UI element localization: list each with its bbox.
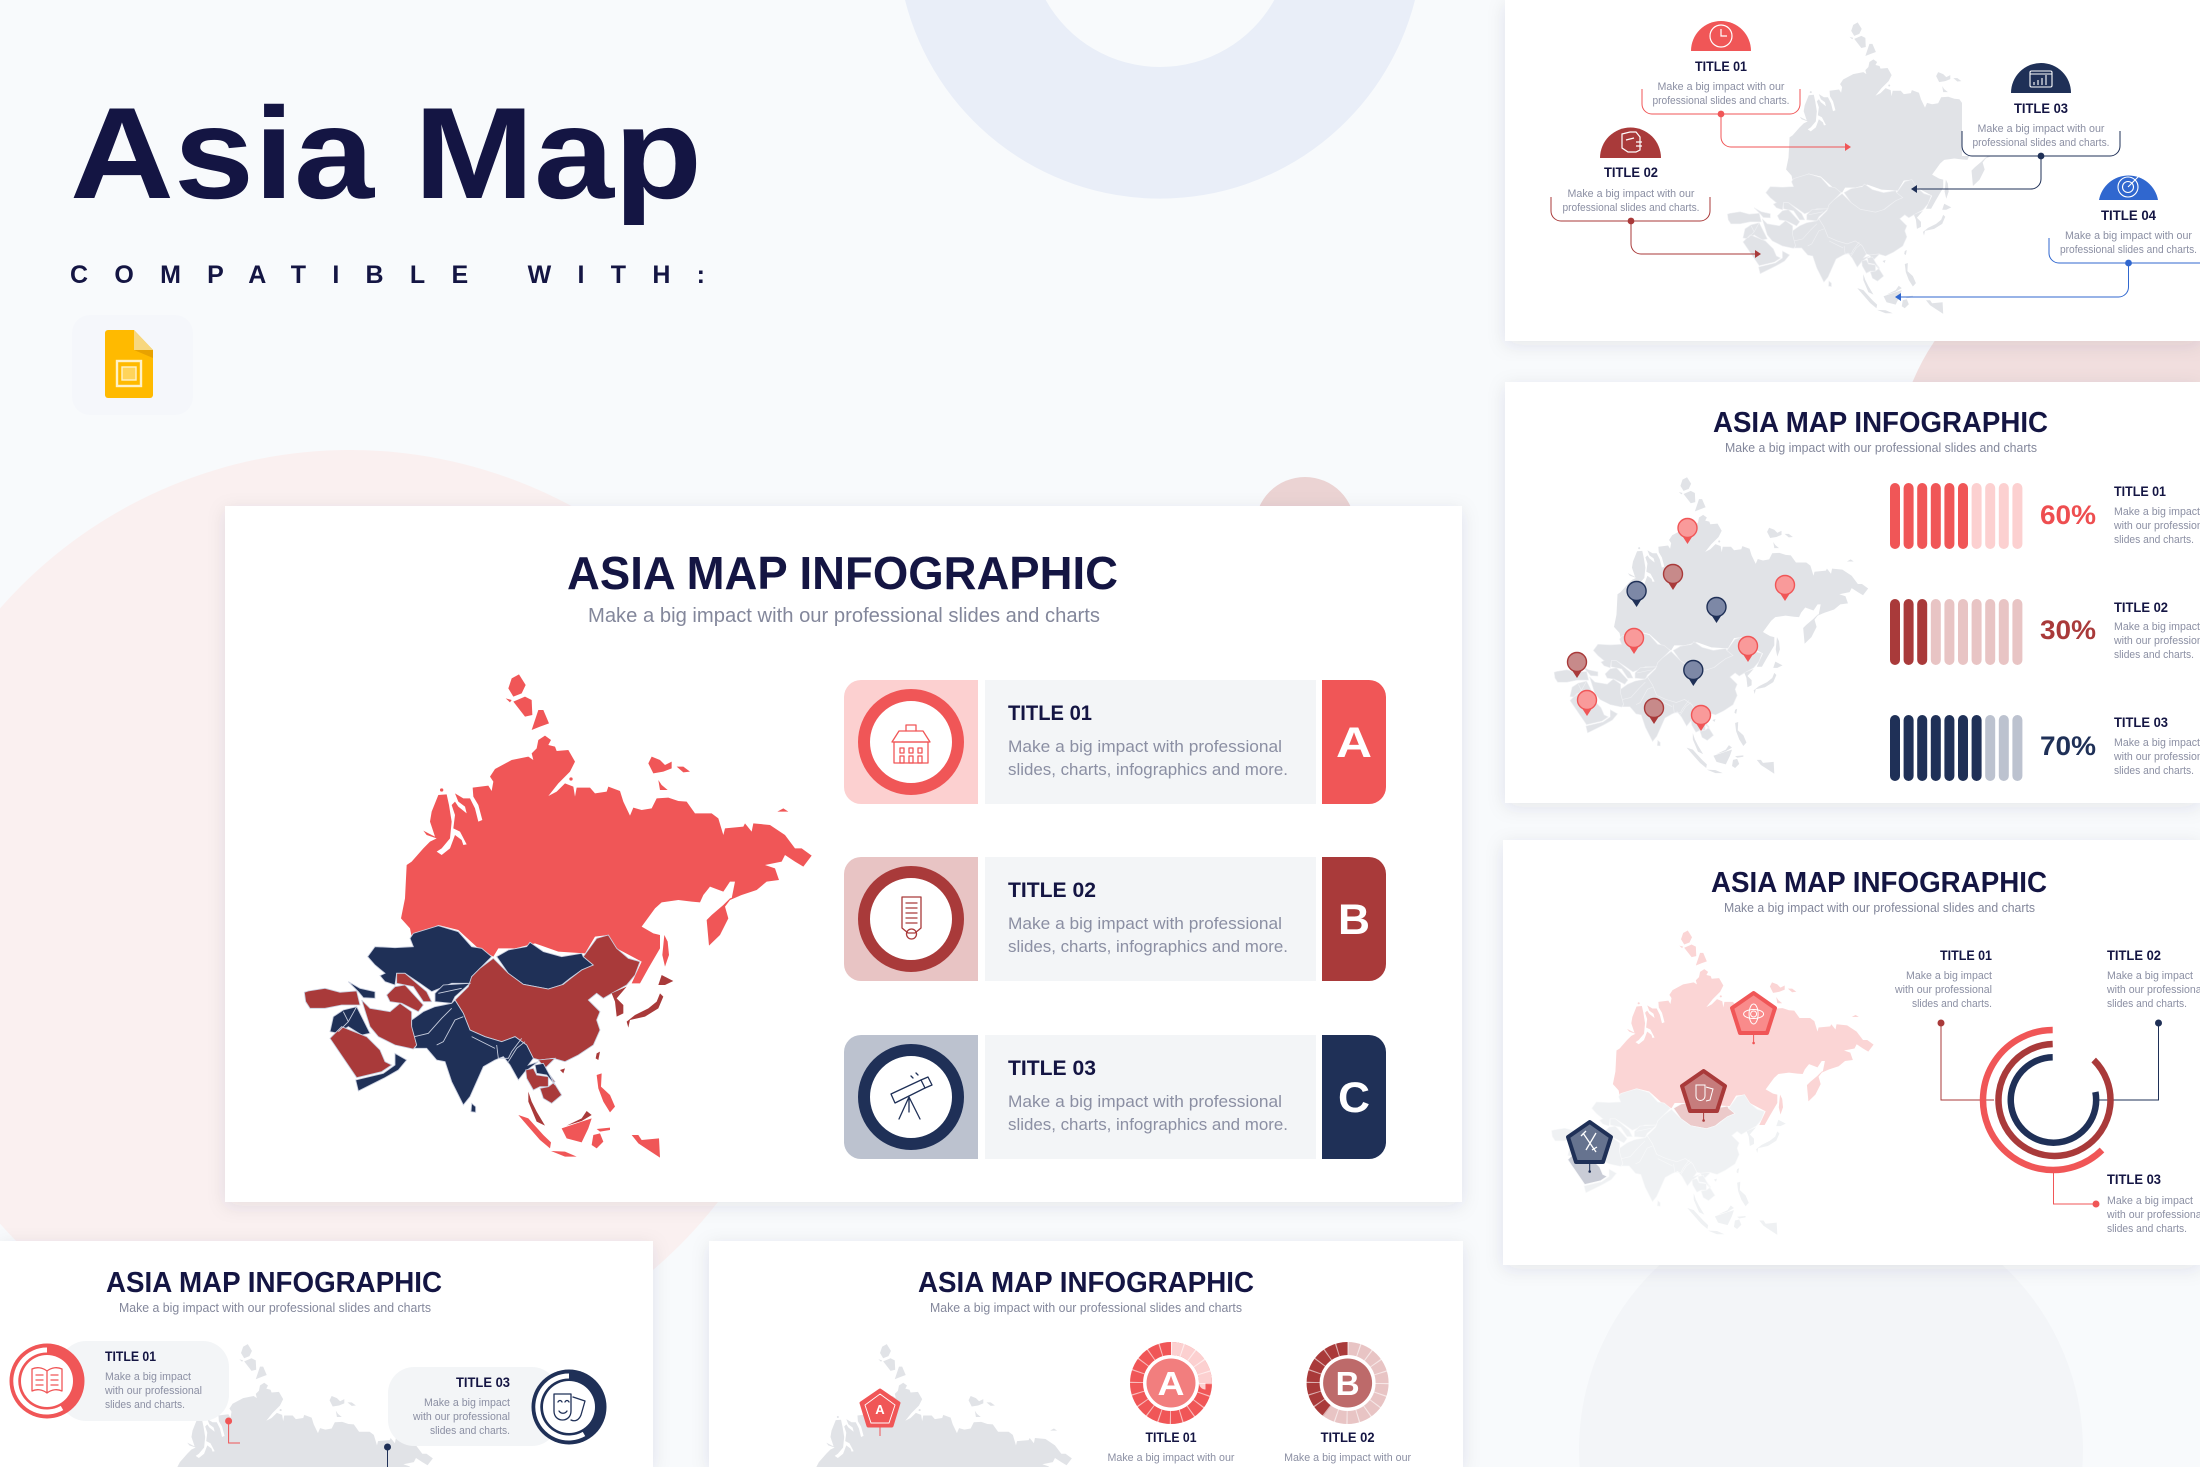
bar chart: 60%: 60% bbox=[2040, 500, 2096, 530]
bar chart: 30%: 30% bbox=[2040, 615, 2096, 645]
panel: bottom left slide bbox=[0, 1241, 653, 1467]
panel: main slide bbox=[225, 506, 1462, 1202]
decorative circle: rose at right bbox=[1895, 240, 2200, 700]
callout: title 01 bbox=[10, 1341, 229, 1421]
icon: telescope bbox=[891, 1073, 932, 1119]
subheading: Make a big impact with our professional slides and charts bbox=[1725, 440, 2037, 455]
icon: certificate bbox=[902, 897, 921, 939]
label: title 03: slides and charts. bbox=[2107, 1223, 2187, 1235]
label: title 02: TITLE 02 bbox=[2107, 948, 2161, 963]
marker: navy pentagon bbox=[1568, 1122, 1611, 1173]
bar chart: 30% bbox=[1890, 599, 2096, 665]
map: pink highlighted bbox=[1552, 930, 1874, 1235]
heading: ASIA MAP INFOGRAPHIC bbox=[106, 1267, 442, 1299]
row: title 02: B bbox=[1338, 896, 1370, 944]
decorative circle: large pink bbox=[0, 450, 816, 1382]
callout: title 02 bbox=[1551, 127, 1761, 258]
label: title 02: slides and charts. bbox=[2114, 649, 2194, 661]
map: grey partial bbox=[816, 1344, 1072, 1467]
map: grey partial bbox=[177, 1344, 433, 1467]
panel: top right slide with callouts bbox=[1505, 0, 2200, 341]
label: title 01: TITLE 01 bbox=[1940, 948, 1992, 963]
row: title 02 bbox=[844, 857, 1386, 981]
callout: title 01: with our professional bbox=[104, 1385, 202, 1397]
connector lines bbox=[1938, 1020, 2162, 1208]
marker: red pentagon bbox=[1732, 993, 1775, 1044]
row: title 02: TITLE 02 bbox=[1008, 879, 1096, 902]
radial chart: three rings bbox=[1983, 1030, 2110, 1170]
callout: title 01: Make a big impact bbox=[105, 1371, 191, 1383]
label: title 01: slides and charts. bbox=[2114, 534, 2194, 546]
row: title 03: TITLE 03 bbox=[1008, 1057, 1096, 1080]
callout: title 03: professional slides and charts. bbox=[1972, 137, 2110, 149]
label: title 02 bbox=[2113, 600, 2200, 661]
donut: A bbox=[1136, 1348, 1206, 1418]
bar chart: 60% bbox=[1890, 483, 2096, 549]
panel: right slide with rings bbox=[1503, 840, 2200, 1265]
heading: ASIA MAP INFOGRAPHIC bbox=[1711, 867, 2047, 899]
map pins bbox=[1568, 518, 1794, 731]
decorative circle: pale blue ring bbox=[905, 0, 1415, 199]
label: title 01 bbox=[2113, 484, 2200, 546]
callout: title 03: with our professional bbox=[412, 1411, 510, 1423]
panel: bottom centre slide bbox=[709, 1241, 1463, 1467]
marker: pentagon A bbox=[861, 1390, 899, 1436]
callout: title 04: Make a big impact with our bbox=[2065, 230, 2192, 242]
icon: masks bbox=[554, 1394, 585, 1421]
callout: title 01: slides and charts. bbox=[105, 1399, 185, 1411]
callout: title 03: TITLE 03 bbox=[456, 1375, 510, 1390]
label: title 03: TITLE 03 bbox=[2107, 1172, 2161, 1187]
heading: ASIA MAP INFOGRAPHIC bbox=[567, 547, 1118, 599]
heading: ASIA MAP INFOGRAPHIC bbox=[918, 1267, 1254, 1299]
label: title 01: slides and charts. bbox=[1912, 998, 1992, 1010]
bar chart: 70%: 70% bbox=[2040, 731, 2096, 761]
marker: pentagon A: A bbox=[875, 1402, 885, 1417]
callout: title 01: Make a big impact with our bbox=[1658, 81, 1785, 93]
row: title 01: slides, charts, infographics and more. bbox=[1008, 761, 1288, 779]
marker line: navy bbox=[384, 1444, 391, 1467]
map: grey with pins bbox=[1554, 477, 1868, 774]
callout: title 02: Make a big impact with our bbox=[1568, 188, 1695, 200]
row: title 01: Make a big impact with professional bbox=[1008, 738, 1282, 756]
label: title 02: slides and charts. bbox=[2107, 998, 2187, 1010]
mask behind title 03 bbox=[1962, 95, 2122, 156]
row: title 01: A bbox=[1336, 719, 1372, 767]
marker line: red bbox=[225, 1418, 240, 1443]
row: title 03: slides, charts, infographics and more. bbox=[1008, 1116, 1288, 1134]
decorative circle: pale bottom right bbox=[1579, 1198, 2083, 1467]
label: title 01: TITLE 01 bbox=[2114, 484, 2166, 499]
label: title 02: TITLE 02 bbox=[1321, 1430, 1375, 1445]
donut: B bbox=[1299, 1335, 1396, 1431]
callout: title 01 bbox=[1642, 21, 1851, 151]
subheading: Make a big impact with our professional slides and charts bbox=[119, 1300, 431, 1315]
callout: title 03: slides and charts. bbox=[430, 1425, 510, 1437]
title: Asia Map bbox=[70, 80, 702, 226]
row: title 01 bbox=[844, 680, 1386, 804]
bar chart: 70% bbox=[1890, 715, 2096, 781]
row: title 03: C bbox=[1338, 1074, 1370, 1122]
callout: title 01: professional slides and charts. bbox=[1652, 95, 1790, 107]
subtitle: compatible with: COMPATIBLE WITH: bbox=[70, 261, 705, 289]
row: title 03: Make a big impact with professional bbox=[1008, 1093, 1282, 1111]
icon: book bbox=[32, 1368, 62, 1393]
label: title 02: Make a big impact bbox=[2107, 970, 2193, 982]
callout: title 03 bbox=[388, 1367, 606, 1446]
marker: dark red pentagon bbox=[1682, 1071, 1725, 1122]
callout: title 04: TITLE 04 bbox=[2101, 208, 2156, 223]
panel: right slide with bars bbox=[1505, 382, 2200, 803]
label: title 02 bbox=[1284, 1430, 1411, 1464]
label: title 01: with our professional bbox=[1894, 984, 1992, 996]
donut: B: B bbox=[1336, 1365, 1360, 1402]
icon: google slides bbox=[72, 315, 193, 415]
label: title 03 bbox=[2106, 1172, 2200, 1235]
callout: title 03: Make a big impact with our bbox=[1978, 123, 2105, 135]
callout: title 02: TITLE 02 bbox=[1604, 165, 1658, 180]
label: title 01 bbox=[1894, 948, 1992, 1010]
row: title 02: slides, charts, infographics and more. bbox=[1008, 938, 1288, 956]
donut: A: A bbox=[1158, 1365, 1184, 1402]
row: title 02: Make a big impact with professional bbox=[1008, 915, 1282, 933]
map: coloured asia bbox=[304, 674, 812, 1158]
callout: title 03 bbox=[1911, 63, 2120, 193]
icon: building bbox=[892, 725, 930, 763]
subheading: Make a big impact with our professional slides and charts bbox=[588, 604, 1100, 627]
callout: title 04 bbox=[1895, 175, 2200, 301]
row: title 03 bbox=[844, 1035, 1386, 1159]
map: grey asia bbox=[1727, 22, 2035, 314]
label: title 01: Make a big impact bbox=[1906, 970, 1992, 982]
label: title 03 bbox=[2113, 715, 2200, 777]
callout: title 03: Make a big impact bbox=[424, 1397, 510, 1409]
callout: title 01: TITLE 01 bbox=[1695, 59, 1747, 74]
label: title 02: Make a big impact with our bbox=[1284, 1452, 1411, 1464]
label: title 03: slides and charts. bbox=[2114, 765, 2194, 777]
label: title 01 bbox=[1108, 1430, 1235, 1464]
label: title 02: TITLE 02 bbox=[2114, 600, 2168, 615]
callout: title 01: TITLE 01 bbox=[105, 1349, 156, 1364]
label: title 02 bbox=[2106, 948, 2200, 1010]
label: title 03: TITLE 03 bbox=[2114, 715, 2168, 730]
label: title 01: TITLE 01 bbox=[1146, 1430, 1197, 1445]
subheading: Make a big impact with our professional slides and charts bbox=[930, 1300, 1242, 1315]
label: title 03: Make a big impact bbox=[2107, 1195, 2193, 1207]
row: title 01: TITLE 01 bbox=[1008, 702, 1092, 725]
decorative circle: small rose bbox=[1255, 477, 1355, 577]
callout: title 02: professional slides and charts. bbox=[1562, 202, 1700, 214]
heading: ASIA MAP INFOGRAPHIC bbox=[1713, 407, 2048, 439]
callout: title 03: TITLE 03 bbox=[2014, 101, 2068, 116]
subheading: Make a big impact with our professional slides and charts bbox=[1724, 900, 2035, 915]
label: title 01: Make a big impact with our bbox=[1108, 1452, 1235, 1464]
